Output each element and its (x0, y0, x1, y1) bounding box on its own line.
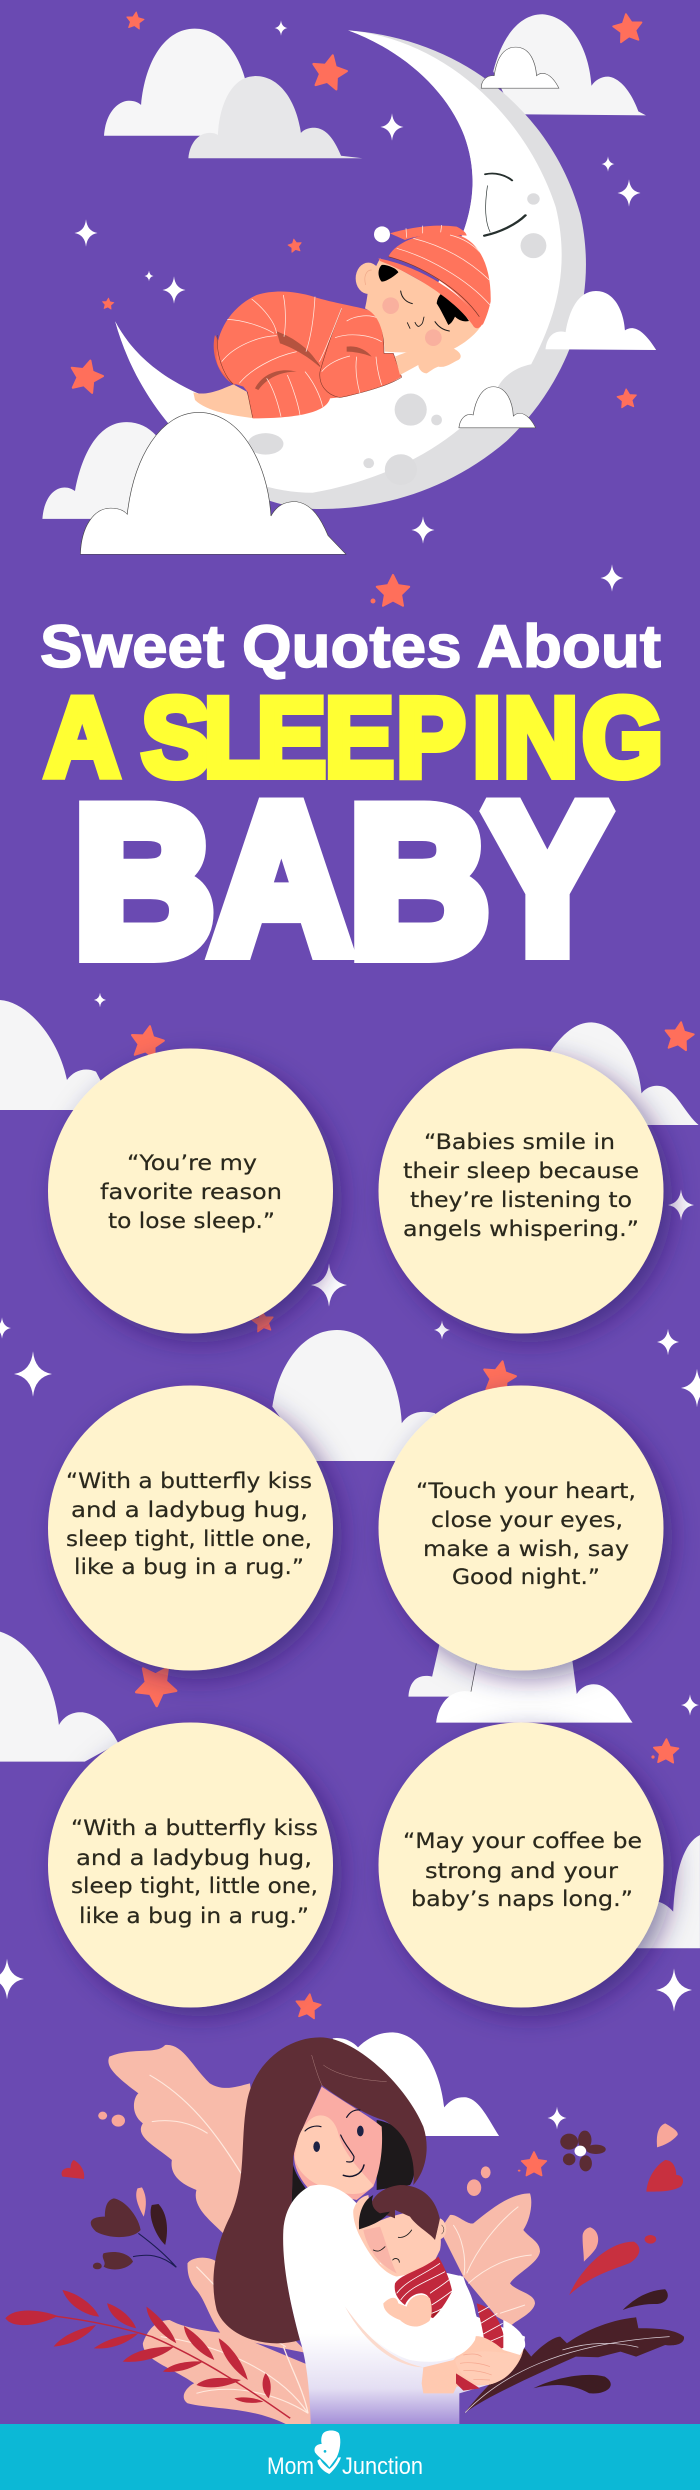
quote 4 (378, 1386, 664, 1670)
small outlined clouds (459, 47, 656, 428)
quote 5: and a ladybug hug, (76, 1846, 312, 1871)
pajama outlines (217, 309, 402, 418)
quote 6 (378, 1722, 664, 2008)
quote 6: “May your coffee be (403, 1829, 642, 1854)
baby shirt (395, 2257, 454, 2319)
baby legs (422, 2336, 523, 2393)
crescent moon (115, 30, 586, 509)
right dark plant (464, 2289, 684, 2413)
illustration: baby sleeping on the moon (42, 14, 656, 554)
baby leg stripes (477, 2303, 506, 2349)
leaf veins (150, 2075, 308, 2413)
quote 2 (378, 1048, 664, 1334)
quote 3: “With a butterfly kiss (66, 1469, 312, 1494)
nightcap (390, 226, 467, 240)
baby in pajamas (193, 225, 491, 418)
quote 2: their sleep because (403, 1159, 639, 1184)
quote 4: make a wish, say (423, 1537, 629, 1562)
quote 1: favorite reason (100, 1180, 282, 1205)
pajama folds (255, 332, 372, 390)
head (356, 263, 381, 294)
right leaf (440, 2193, 540, 2325)
quote 3: like a bug in a rug.” (74, 1555, 304, 1580)
title line 1: Sweet Quotes About (40, 613, 661, 680)
title stars (94, 564, 624, 1007)
cuff (503, 2320, 525, 2355)
back clouds (104, 14, 646, 158)
front clouds (42, 412, 346, 554)
white cloud (333, 2032, 499, 2136)
hair behind (292, 2120, 415, 2203)
quote 3: sleep tight, little one, (66, 1527, 312, 1552)
right leaf veins (453, 2207, 532, 2313)
quote 1 (48, 1048, 333, 1334)
quote 4: “Touch your heart, (416, 1479, 636, 1504)
quote 4: Good night.” (452, 1565, 600, 1590)
dark flower (560, 2131, 606, 2171)
quote 3: and a ladybug hug, (71, 1498, 308, 1523)
pom-pom (374, 226, 390, 242)
quote 2: angels whispering.” (403, 1217, 639, 1242)
pajama stripes (222, 295, 382, 417)
quote 4: close your eyes, (431, 1508, 623, 1533)
hair (379, 265, 398, 282)
hands (395, 347, 461, 375)
illustration: mother holding baby (213, 2037, 540, 2424)
face (294, 2087, 382, 2200)
cheeks (382, 297, 399, 314)
quote 1: to lose sleep.” (108, 1209, 275, 1234)
craters (248, 193, 546, 485)
stars around quotes (0, 1020, 700, 2019)
pajama back edge (214, 335, 240, 385)
moon face (484, 174, 525, 236)
background clouds behind quotes (0, 1000, 700, 1948)
mother's hand (455, 2350, 520, 2385)
quote 1: “You’re my (127, 1151, 257, 1176)
mother brows, nose and smile (305, 2110, 364, 2176)
small star and sparkle near mother (522, 2107, 566, 2176)
quote 6: strong and your (425, 1859, 618, 1884)
mother's arm (337, 2275, 477, 2362)
quote 5 (48, 1722, 333, 2008)
eyes and mouth (401, 291, 449, 331)
quote 2: they’re listening to (410, 1188, 632, 1213)
footer bar (0, 2424, 700, 2490)
left dark flowers (91, 2187, 176, 2269)
mother eyes (313, 2126, 364, 2152)
quote 5: sleep tight, little one, (71, 1874, 318, 1899)
pajama body (217, 292, 402, 418)
title line 2: A SLEEPING (45, 675, 663, 800)
baby arm (383, 2295, 432, 2327)
logo: MomJunction (267, 2431, 423, 2480)
baby head base (353, 2195, 397, 2277)
hearts and drops (62, 2112, 683, 2295)
long hair (213, 2037, 427, 2343)
quote 5: “With a butterfly kiss (71, 1816, 318, 1841)
foliage around mother (5, 2032, 684, 2424)
baby hair (370, 2185, 440, 2240)
title line 3: BABY (75, 761, 612, 999)
baby features (373, 2225, 444, 2262)
mother's body (283, 2185, 525, 2424)
red branch (5, 2290, 290, 2418)
arm shadow (345, 2307, 423, 2367)
foot (193, 384, 255, 418)
logo icon (315, 2431, 341, 2474)
sky stars top (67, 11, 644, 544)
logo: MomJunction: Junction (342, 2453, 423, 2480)
pink leaves (108, 2045, 312, 2424)
quote 6: baby’s naps long.” (411, 1887, 633, 1912)
title (40, 613, 663, 999)
logo: MomJunction: Mom (267, 2453, 314, 2480)
quote 3 (48, 1386, 333, 1670)
quote 5: like a bug in a rug.” (79, 1904, 309, 1929)
quote 2: “Babies smile in (424, 1130, 615, 1155)
